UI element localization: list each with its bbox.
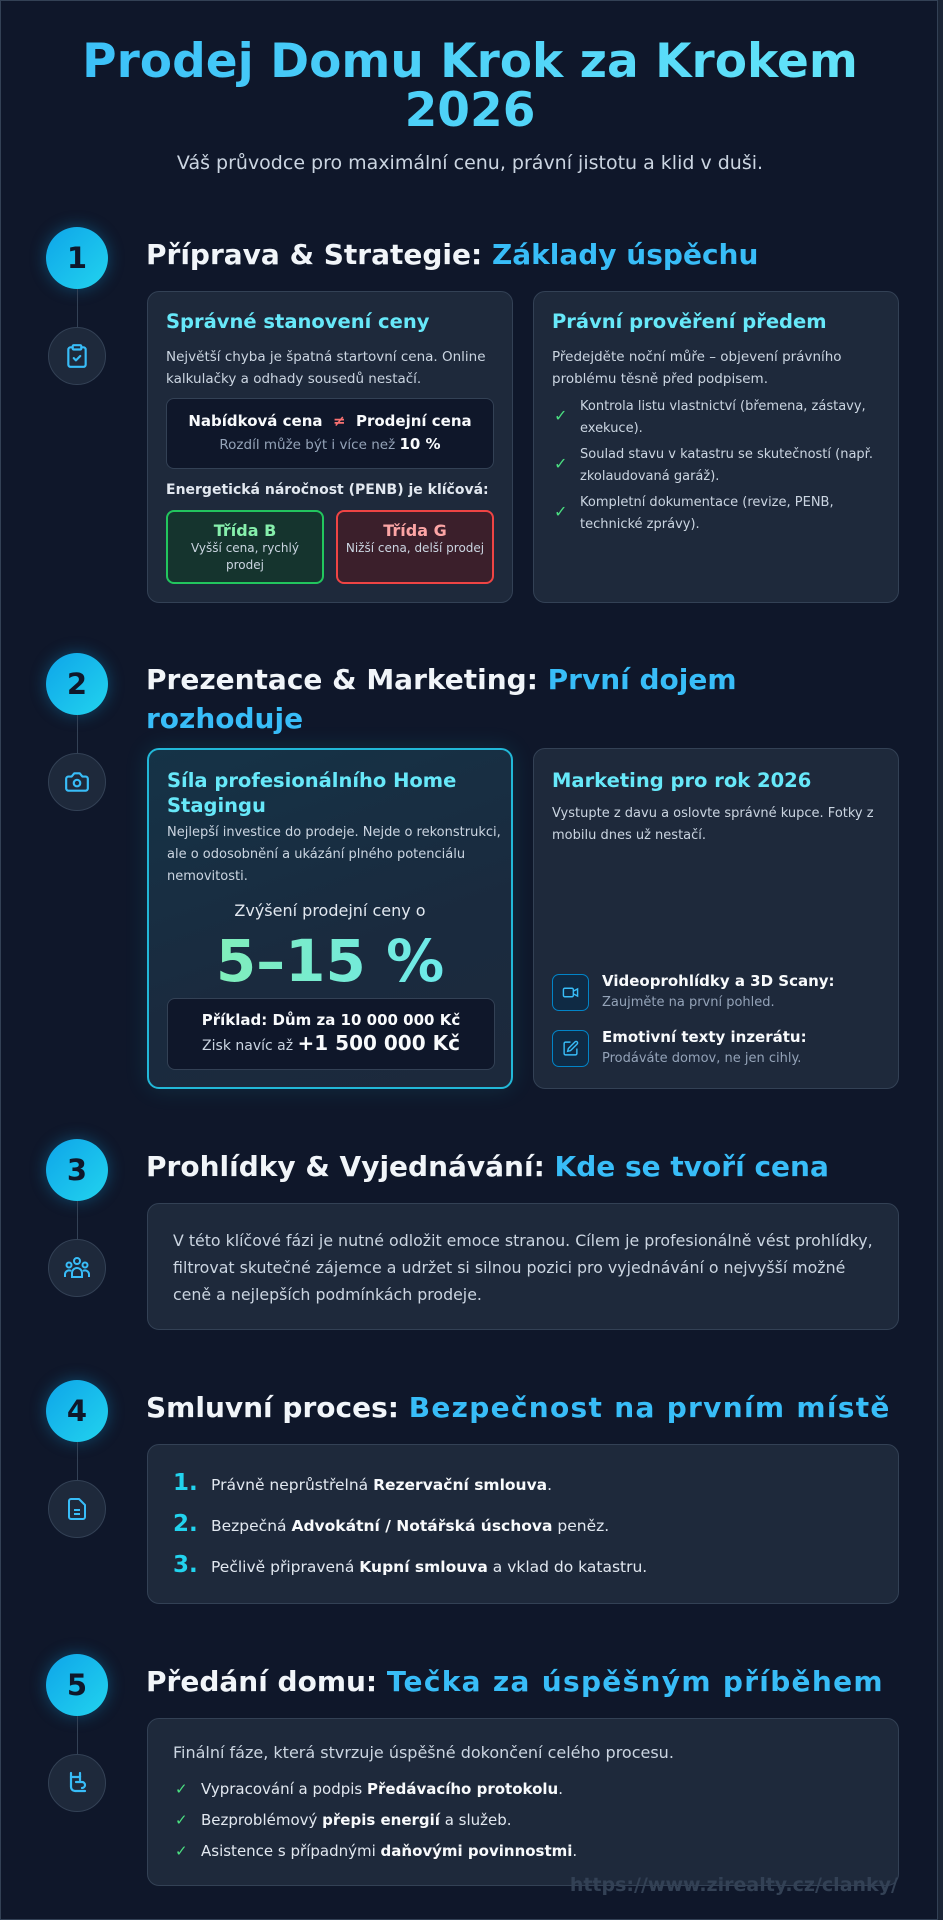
panel: legal check: Právní prověření předem — [552, 310, 827, 333]
big stat: 5–15 % — [216, 927, 444, 995]
checklist: Bezproblémový přepis energií a služeb. — [201, 1811, 512, 1829]
icon: clipboard — [48, 327, 106, 385]
footer url: https://www.zirealty.cz/clanky/ — [570, 1874, 898, 1896]
checklist: ✓ — [175, 1780, 188, 1798]
panel: handover — [147, 1718, 899, 1886]
panel: pricing: Největší chyba je špatná startovní cena. Online kalkulačky a odhady sousedů nestačí. — [166, 349, 486, 387]
checklist: Kompletní dokumentace (revize, PENB, technické zprávy). — [580, 495, 834, 532]
panel: contract steps: Bezpečná Advokátní / Notářská úschova peněz. — [211, 1517, 609, 1535]
subtitle: Váš průvodce pro maximální cenu, právní jistotu a klid v duši. — [177, 152, 763, 174]
class B box: Třída B — [214, 521, 276, 540]
panel: legal check: Předejděte noční můře – objevení právního problému těsně před podpisem. — [552, 349, 842, 387]
panel: contract steps: 1. — [173, 1470, 198, 1496]
step 3 number: 3 — [67, 1153, 87, 1187]
class G box: Nižší cena, delší prodej — [346, 541, 484, 555]
panel: pricing: Energetická náročnost (PENB) je klíčová: — [166, 482, 489, 498]
panel: home staging — [147, 748, 513, 1089]
class G box: Třída G — [383, 521, 447, 540]
panel: contract steps: 3. — [173, 1552, 198, 1578]
title — [1, 37, 939, 135]
icon: video — [552, 974, 589, 1011]
panel: handover: Finální fáze, která stvrzuje úspěšné dokončení celého procesu. — [173, 1743, 674, 1762]
checklist: ✓ — [175, 1811, 188, 1829]
step 5 number — [46, 1654, 108, 1716]
heading 4: Smluvní proces: Bezpečnost na prvním místě — [146, 1391, 891, 1424]
checklist: Asistence s případnými daňovými povinnostmi. — [201, 1842, 577, 1860]
panel: home staging: Zvýšení prodejní ceny o — [234, 901, 426, 920]
example box: Příklad: Dům za 10 000 000 Kč — [202, 1011, 460, 1029]
icon: pen — [552, 1030, 589, 1067]
checklist — [554, 399, 873, 532]
example box: Zisk navíc až +1 500 000 Kč — [202, 1031, 460, 1055]
example box — [167, 998, 495, 1070]
class G box — [336, 510, 494, 584]
checklist: ✓ — [554, 406, 567, 425]
step 4 number: 4 — [67, 1394, 87, 1428]
panel: pricing: Správné stanovení ceny — [166, 310, 429, 333]
checklist: Soulad stavu v katastru se skutečností (např. zkolaudovaná garáž). — [580, 447, 873, 484]
class B box — [166, 510, 324, 584]
step 1 number — [46, 227, 108, 289]
step 5 number: 5 — [67, 1668, 87, 1702]
panel: marketing 2026: Prodáváte domov, ne jen cihly. — [602, 1051, 801, 1066]
heading 1: Příprava & Strategie: Základy úspěchu — [146, 238, 758, 271]
heading 2 — [146, 663, 737, 735]
panel: marketing 2026: Zaujměte na první pohled. — [602, 995, 775, 1010]
panel: home staging: Síla profesionálního Home Stagingu — [167, 769, 456, 817]
step 1 number: 1 — [67, 241, 87, 275]
title: 2026 — [405, 83, 535, 138]
panel: contract steps: Pečlivě připravená Kupní smlouva a vklad do katastru. — [211, 1558, 647, 1576]
callout: offer vs sale price: Rozdíl může být i více než 10 % — [219, 435, 441, 453]
step 2 number: 2 — [67, 667, 87, 701]
panel: pricing — [147, 291, 513, 603]
checklist: Kontrola listu vlastnictví (břemena, zástavy, exekuce). — [580, 399, 866, 436]
callout: offer vs sale price: Nabídková cena ≠ Prodejní cena — [188, 412, 472, 430]
heading 5: Předání domu: Tečka za úspěšným příběhem — [146, 1665, 884, 1698]
icon: handover — [48, 1754, 106, 1812]
class B box: Vyšší cena, rychlý — [191, 541, 299, 555]
panel: marketing 2026 — [533, 748, 899, 1089]
checklist: ✓ — [554, 502, 567, 521]
big stat — [149, 926, 511, 996]
icon: document — [48, 1480, 106, 1538]
checklist: ✓ — [175, 1842, 188, 1860]
step 4 number — [46, 1380, 108, 1442]
checklist — [175, 1780, 577, 1860]
class B box: prodej — [226, 558, 264, 572]
heading 2: Prezentace & Marketing: První dojem — [146, 663, 737, 696]
checklist: Vypracování a podpis Předávacího protokolu. — [201, 1780, 563, 1798]
panel: contract steps: 2. — [173, 1511, 198, 1537]
panel: legal check — [533, 291, 899, 603]
heading 2: rozhoduje — [146, 702, 303, 735]
step 2 number — [46, 653, 108, 715]
panel: home staging: Nejlepší investice do prodeje. Nejde o rekonstrukci, ale o odosobnění a ukázání plného potenciálu nemovitosti. — [167, 825, 501, 884]
heading 3: Prohlídky & Vyjednávání: Kde se tvoří cena — [146, 1150, 829, 1183]
step 3 number — [46, 1139, 108, 1201]
icon: camera — [48, 753, 106, 811]
panel: marketing 2026: Videoprohlídky a 3D Scany: — [602, 972, 835, 990]
panel: marketing 2026: Emotivní texty inzerátu: — [602, 1028, 807, 1046]
panel: contract steps: Právně neprůstřelná Rezervační smlouva. — [211, 1476, 552, 1494]
panel: marketing 2026: Vystupte z davu a oslovte správné kupce. Fotky z mobilu dnes už nestačí. — [552, 806, 874, 843]
panel: viewings text — [147, 1203, 899, 1330]
title: Prodej Domu Krok za Krokem — [82, 34, 858, 89]
checklist: ✓ — [554, 454, 567, 473]
icon: people — [48, 1239, 106, 1297]
callout: offer vs sale price — [166, 398, 494, 469]
panel: marketing 2026: Marketing pro rok 2026 — [552, 769, 811, 792]
panel: viewings text: V této klíčové fázi je nutné odložit emoce stranou. Cílem je profesionálně vést prohlídky, filtrovat skutečné zájemce a udržet si silnou pozici pro vyjednávání o nejvyšší možné ceně a nejlepších podmínkách prodeje. — [173, 1231, 873, 1304]
panel: contract steps — [147, 1444, 899, 1604]
